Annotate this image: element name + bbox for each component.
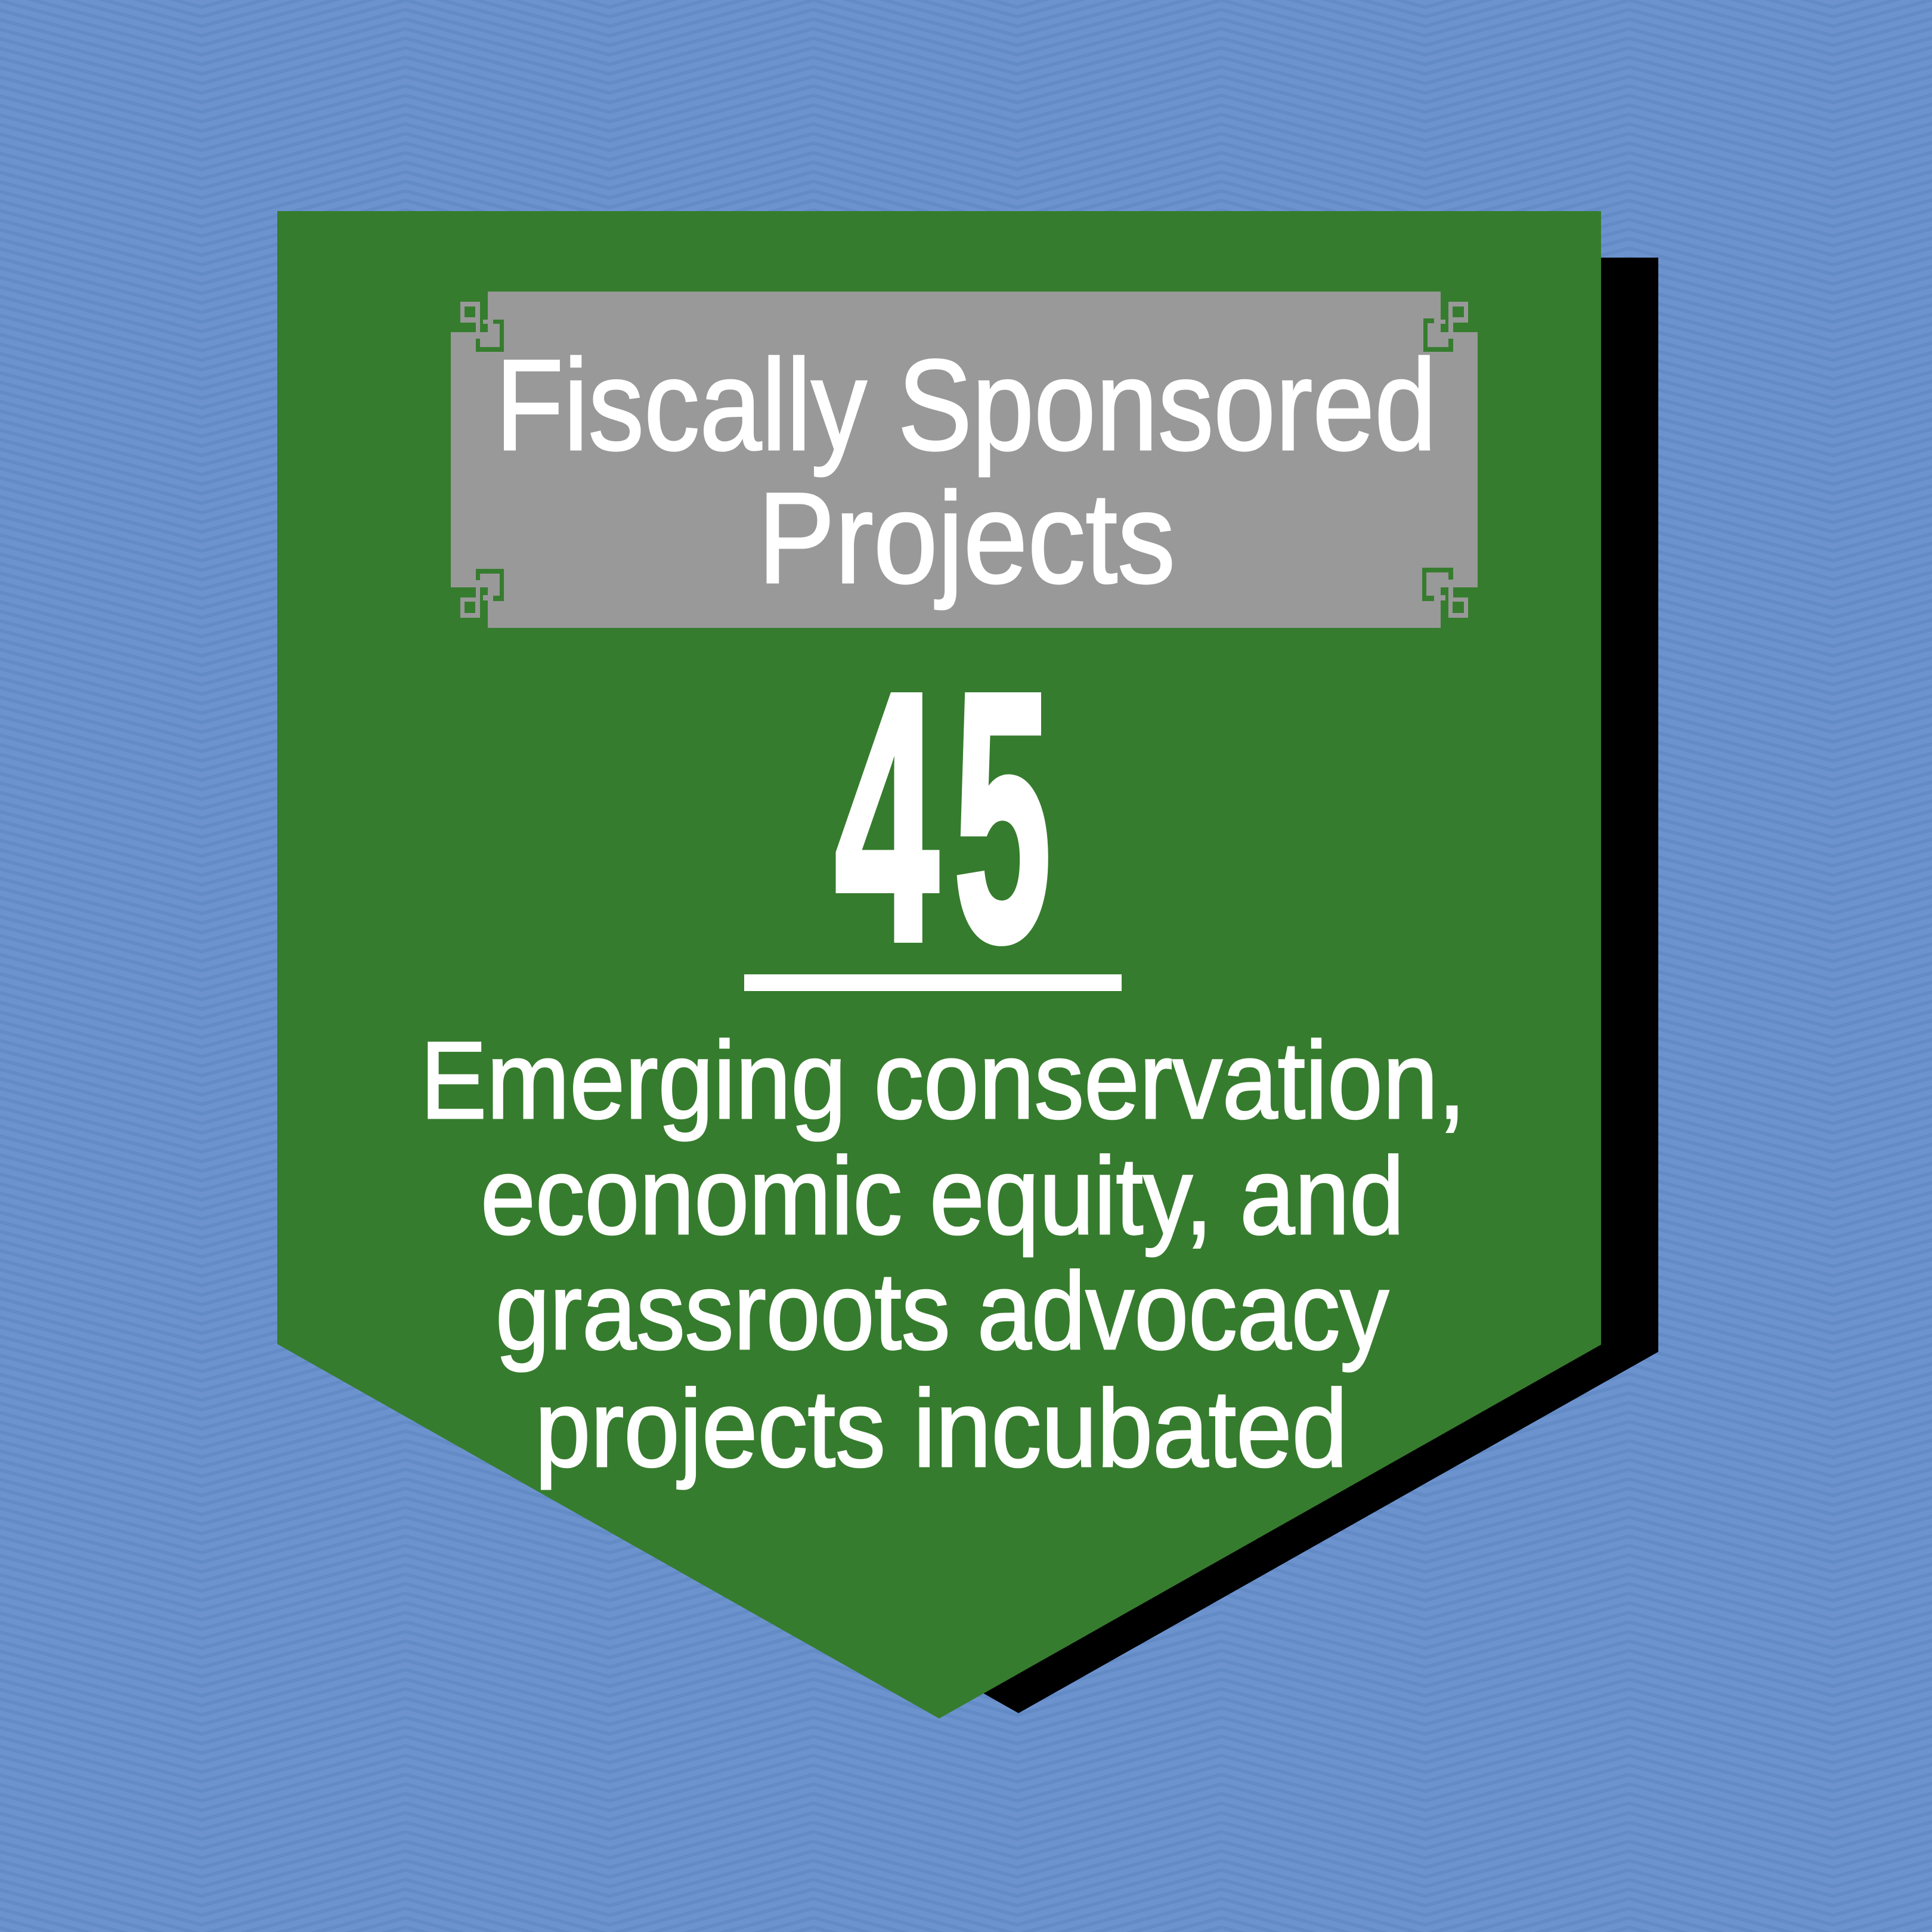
divider rule [744, 974, 1122, 991]
ornament: bottom left [460, 569, 504, 618]
heading: Projects [758, 466, 1175, 610]
ornament: top left [460, 302, 504, 352]
panel shadow [379, 258, 1658, 1713]
panel: green pennant badge [277, 211, 1601, 1719]
big number: 4 [835, 619, 940, 1014]
ornament: top right [1423, 302, 1468, 352]
panel: green pennant badge: 5 [953, 619, 1051, 1014]
ornament: bottom right [1422, 568, 1468, 618]
heading: Fiscally Sponsored [496, 333, 1436, 477]
description text: Emerging conservation, [420, 1018, 1466, 1141]
description text: economic equity, and [481, 1134, 1404, 1257]
description text: projects incubated [535, 1367, 1348, 1490]
description text: grassroots advocacy [496, 1249, 1389, 1372]
heading [496, 333, 1436, 610]
description text [420, 1018, 1466, 1490]
title plaque with corner ornaments [451, 292, 1478, 628]
